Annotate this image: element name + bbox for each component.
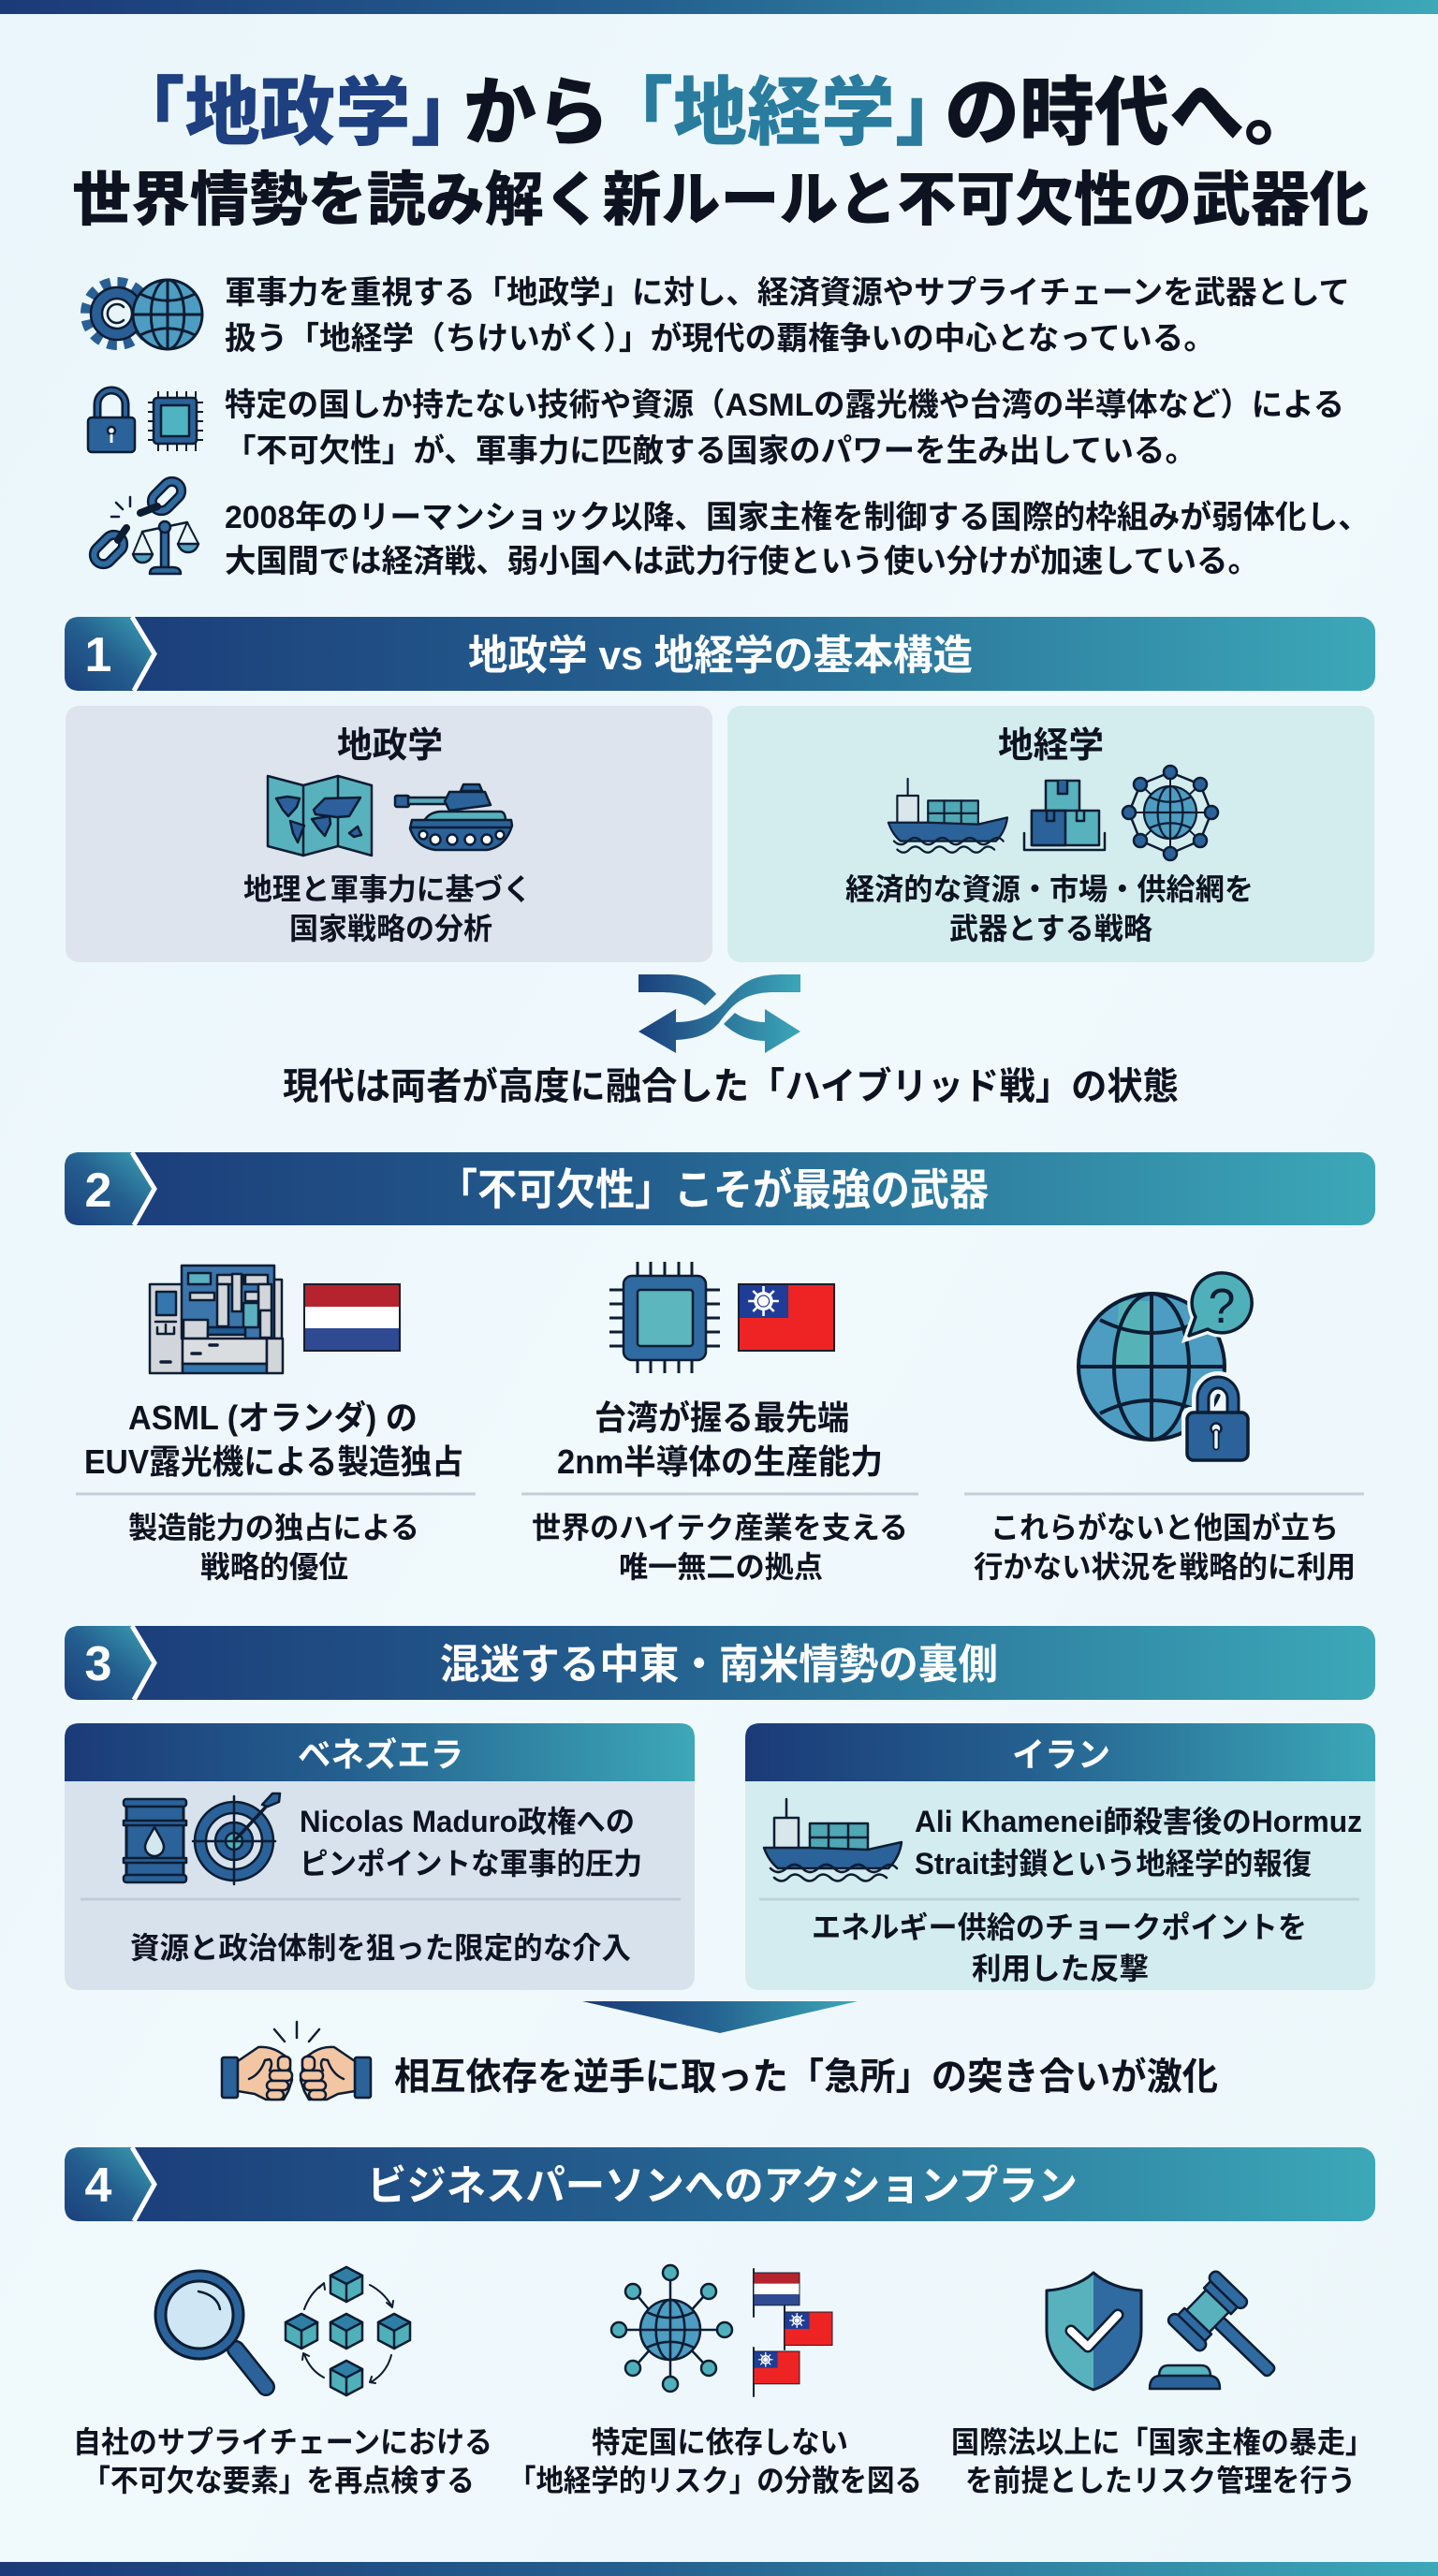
text: ASML description bbox=[128, 1511, 419, 1584]
text: geoeconomics definition: 経済的な資源・市場・供給網を bbox=[845, 872, 1254, 906]
panel: geopolitics bbox=[66, 706, 712, 962]
bottom gradient bar bbox=[0, 2562, 1438, 2576]
text: leverage description bbox=[974, 1511, 1356, 1584]
icon: shield with check bbox=[1047, 2273, 1141, 2390]
section 1 header bar: 1 bbox=[85, 628, 111, 682]
text: point 2 bbox=[225, 388, 1344, 469]
icon: Taiwan flag bbox=[739, 1284, 834, 1351]
icon: tank bbox=[395, 784, 512, 850]
icon: stacked boxes bbox=[1024, 781, 1105, 850]
column: leverage bbox=[964, 1273, 1364, 1584]
section 4 header bar: 4 bbox=[85, 2159, 112, 2213]
text: mutual dependence: 相互依存を逆手に取った「急所」の突き合いが激化 bbox=[394, 2056, 1218, 2098]
icon: oil barrel bbox=[124, 1799, 186, 1882]
text: point 2: 特定の国しか持たない技術や資源（ASMLの露光機や台湾の半導体など）による bbox=[225, 388, 1344, 423]
text: ASML title bbox=[84, 1398, 463, 1481]
section 4 header bar: ビジネスパーソンへのアクションプラン bbox=[367, 2163, 1078, 2209]
icon: padlock and chip bbox=[88, 390, 203, 452]
icon: cargo ship bbox=[764, 1799, 902, 1881]
section 2 header bar: 2 bbox=[85, 1164, 111, 1218]
heading: Iran: イラン bbox=[1012, 1735, 1110, 1774]
text: ASML description: 製造能力の独占による bbox=[128, 1511, 419, 1544]
text: geopolitics definition: 国家戦略の分析 bbox=[289, 912, 492, 945]
text: Iran action bbox=[915, 1805, 1362, 1881]
title: から bbox=[463, 71, 609, 154]
text: Iran summary: 利用した反撃 bbox=[972, 1952, 1149, 1985]
icon: magnifier bbox=[155, 2271, 266, 2387]
section 1 header bar bbox=[65, 617, 1375, 691]
text: leverage description: 行かない状況を戦略的に利用 bbox=[974, 1550, 1356, 1584]
text: diversify risk bbox=[508, 2425, 922, 2497]
text: geoeconomics definition bbox=[845, 872, 1254, 945]
text: point 3: 大国間では経済戦、弱小国へは武力行使という使い分けが加速している。 bbox=[225, 543, 1259, 579]
intro point 1 bbox=[86, 275, 1350, 357]
intro point 2 bbox=[88, 388, 1344, 469]
text: ASML title: EUV露光機による製造独占 bbox=[84, 1442, 463, 1481]
text: supply chain review bbox=[73, 2425, 492, 2497]
section 3 header bar: 混迷する中東・南米情勢の裏側 bbox=[440, 1642, 998, 1688]
section 3 header bar bbox=[65, 1626, 1375, 1700]
text: Iran summary bbox=[812, 1910, 1307, 1985]
text: Venezuela summary: 資源と政治体制を狙った限定的な介入 bbox=[130, 1931, 631, 1965]
text: Taiwan description: 世界のハイテク産業を支える bbox=[532, 1511, 908, 1544]
action: supply chain review bbox=[73, 2267, 492, 2497]
icon: crossing arrows bbox=[638, 974, 800, 1053]
text: Taiwan title bbox=[557, 1398, 883, 1481]
text: geopolitics definition: 地理と軍事力に基づく bbox=[243, 872, 532, 906]
icon: broken chain and scales bbox=[90, 477, 198, 574]
text: Iran summary: エネルギー供給のチョークポイントを bbox=[812, 1910, 1307, 1944]
text: geopolitics definition bbox=[243, 872, 532, 945]
section 1 header bar: 地政学 vs 地経学の基本構造 bbox=[468, 633, 973, 679]
icon: globe network bbox=[611, 2265, 732, 2392]
text: Venezuela action: ピンポイントな軍事的圧力 bbox=[300, 1847, 642, 1881]
icon: globe with question and lock bbox=[1078, 1273, 1254, 1466]
text: point 1: 軍事力を重視する「地政学」に対し、経済資源やサプライチェーンを武器として bbox=[225, 275, 1350, 311]
icon: three flags bbox=[754, 2269, 832, 2396]
text: geoeconomics definition: 武器とする戦略 bbox=[949, 912, 1152, 945]
heading: Venezuela: ベネズエラ bbox=[298, 1735, 463, 1774]
text: risk management: を前提としたリスク管理を行う bbox=[965, 2464, 1356, 2497]
panel: Iran bbox=[745, 1723, 1375, 1990]
text: Iran action: Ali Khamenei師殺害後のHormuz bbox=[915, 1805, 1362, 1838]
text: Taiwan title: 台湾が握る最先端 bbox=[594, 1398, 849, 1437]
icon: cubes cycle bbox=[286, 2267, 410, 2395]
text: point 1: 扱う「地経学（ちけいがく）」が現代の覇権争いの中心となっている。 bbox=[225, 320, 1215, 357]
text: supply chain review: 自社のサプライチェーンにおける bbox=[73, 2425, 492, 2459]
icon: globe network bbox=[1123, 766, 1218, 860]
title: の時代へ。 bbox=[945, 71, 1319, 154]
text: Taiwan description bbox=[532, 1511, 908, 1584]
action: diversify risk bbox=[508, 2265, 922, 2497]
text: hybrid warfare: 現代は両者が高度に融合した「ハイブリッド戦」の状態 bbox=[283, 1066, 1179, 1107]
text: supply chain review: 「不可欠な要素」を再点検する bbox=[82, 2464, 475, 2497]
section 3 header bar: 3 bbox=[85, 1637, 111, 1691]
text: point 3 bbox=[225, 499, 1370, 579]
arrow: down triangle bbox=[582, 2001, 858, 2033]
text: Taiwan description: 唯一無二の拠点 bbox=[619, 1550, 823, 1584]
top gradient bar bbox=[0, 0, 1438, 14]
text: Venezuela action: Nicolas Maduro政権への bbox=[300, 1805, 635, 1838]
text: Venezuela action bbox=[300, 1805, 642, 1881]
icon: clashing fists bbox=[222, 2022, 371, 2100]
icon: Netherlands flag bbox=[304, 1284, 400, 1351]
intro point 3 bbox=[90, 477, 1370, 579]
column: ASML bbox=[76, 1266, 476, 1584]
section 4 header bar bbox=[65, 2147, 1375, 2221]
title: 「地経学」 bbox=[599, 71, 969, 154]
text: leverage description: これらがないと他国が立ち bbox=[990, 1511, 1339, 1544]
title: 世界情勢を読み解く新ルールと不可欠性の武器化 bbox=[72, 168, 1369, 233]
icon: gavel bbox=[1150, 2269, 1297, 2398]
text: risk management: 国際法以上に「国家主権の暴走」 bbox=[951, 2425, 1373, 2459]
column: Taiwan bbox=[521, 1262, 918, 1584]
icon: EUV lithography machine bbox=[150, 1266, 283, 1373]
text: ASML description: 戦略的優位 bbox=[200, 1550, 348, 1584]
title bbox=[72, 71, 1369, 233]
icon: folded world map bbox=[268, 776, 372, 856]
icon: globe with question and lock: ? bbox=[1209, 1280, 1235, 1334]
text: point 3: 2008年のリーマンショック以降、国家主権を制御する国際的枠組みが弱体化し、 bbox=[225, 499, 1370, 535]
icon: cargo ship bbox=[888, 779, 1007, 853]
heading: geoeconomics: 地経学 bbox=[998, 726, 1104, 766]
section 2 header bar bbox=[65, 1152, 1375, 1225]
icon: semiconductor chip bbox=[609, 1262, 720, 1373]
text: Taiwan title: 2nm半導体の生産能力 bbox=[557, 1442, 883, 1481]
title: 「地政学」 bbox=[110, 71, 486, 154]
text: ASML title: ASML (オランダ) の bbox=[128, 1398, 418, 1437]
text: Iran action: Strait封鎖という地経学的報復 bbox=[915, 1847, 1312, 1881]
text: diversify risk: 特定国に依存しない bbox=[592, 2425, 848, 2459]
text: diversify risk: 「地経学的リスク」の分散を図る bbox=[508, 2464, 922, 2497]
icon: gear and globe bbox=[86, 280, 202, 349]
heading: geopolitics: 地政学 bbox=[337, 726, 443, 766]
icon: target with arrow bbox=[193, 1793, 280, 1884]
text: point 1 bbox=[225, 275, 1350, 357]
action: risk management bbox=[951, 2269, 1373, 2497]
section 2 header bar: 「不可欠性」こそが最強の武器 bbox=[438, 1165, 989, 1214]
panel: geoeconomics bbox=[727, 706, 1374, 962]
text: point 2: 「不可欠性」が、軍事力に匹敵する国家のパワーを生み出している。 bbox=[225, 432, 1196, 469]
text: risk management bbox=[951, 2425, 1373, 2497]
panel: Venezuela bbox=[65, 1723, 695, 1990]
